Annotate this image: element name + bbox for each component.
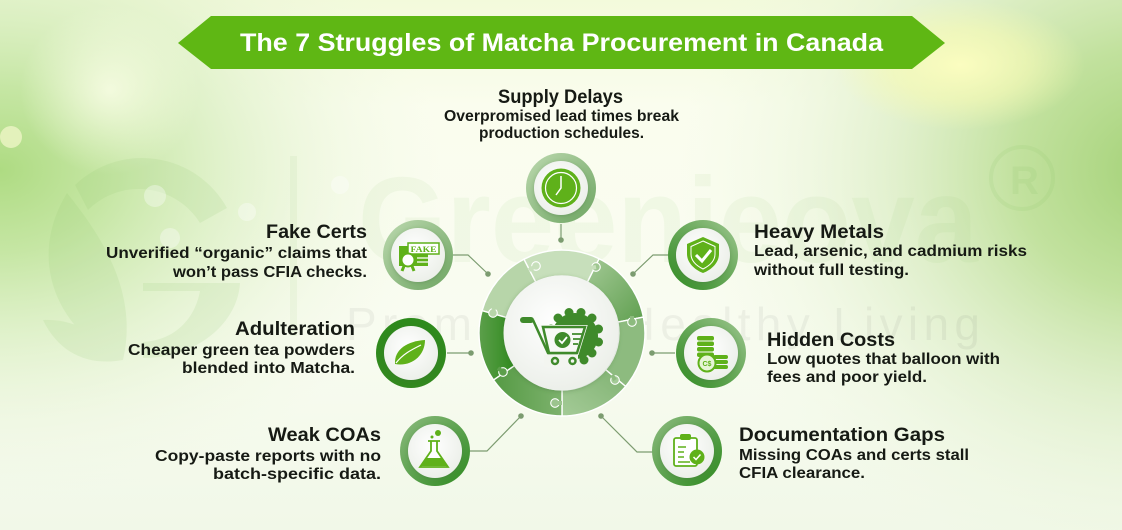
text: Adulteration: Adulteration <box>235 319 355 340</box>
watermark: logo and brand <box>43 147 1053 362</box>
text: Supply Delays <box>444 87 679 142</box>
text: Documentation Gaps: CFIA clearance. <box>739 465 865 482</box>
text: Hidden Costs: Low quotes that balloon with <box>767 351 1000 368</box>
text: Hidden Costs <box>767 330 1000 386</box>
icon circle: clock <box>526 153 596 223</box>
icon circle: flask <box>400 416 470 486</box>
text: Supply Delays: production schedules. <box>479 125 644 142</box>
icon circle: coins <box>676 318 746 388</box>
icon circle: clipboard <box>652 416 722 486</box>
text: Fake Certs: Unverified “organic” claims that <box>106 245 368 262</box>
title banner <box>178 16 945 69</box>
text: Weak COAs <box>155 425 381 483</box>
text: Documentation Gaps: Documentation Gaps <box>739 425 945 446</box>
text: Fake Certs: won’t pass CFIA checks. <box>172 264 367 281</box>
text: Heavy Metals: Heavy Metals <box>754 222 884 243</box>
cart <box>520 317 585 364</box>
text: Adulteration: Cheaper green tea powders <box>128 342 355 359</box>
connectors <box>447 224 675 452</box>
text: Documentation Gaps <box>739 425 969 482</box>
text: Heavy Metals <box>753 222 1027 279</box>
icon circle: fake certificate: FAKE <box>410 244 437 254</box>
title banner: The 7 Struggles of Matcha Procurement in Canada <box>240 29 884 57</box>
icon circle: coins: C$ <box>702 361 712 368</box>
watermark: logo and brand: Promoting Healthy Living <box>346 298 980 350</box>
gear <box>546 308 603 364</box>
icon circle: leaf <box>376 318 446 388</box>
text: Supply Delays: Supply Delays <box>498 87 623 108</box>
text: Weak COAs: Weak COAs <box>268 425 381 446</box>
text: Adulteration: blended into Matcha. <box>182 360 355 377</box>
central puzzle ring <box>479 250 645 416</box>
puzzle knobs <box>489 262 636 407</box>
watermark: logo and brand: R <box>1010 159 1039 203</box>
text: Hidden Costs: fees and poor yield. <box>767 369 927 386</box>
text: Fake Certs <box>106 222 368 281</box>
central disc with cart and gear icon <box>504 276 618 390</box>
text: Documentation Gaps: Missing COAs and certs stall <box>739 447 969 464</box>
text: Supply Delays: Overpromised lead times break <box>444 108 679 125</box>
text: Heavy Metals: without full testing. <box>753 262 909 279</box>
text: Weak COAs: batch-specific data. <box>213 466 381 483</box>
text: Fake Certs: Fake Certs <box>266 222 367 243</box>
icon circle: shield <box>668 220 738 290</box>
icon circle: fake certificate <box>383 220 453 290</box>
text: Heavy Metals: Lead, arsenic, and cadmium risks <box>754 243 1027 260</box>
text: Hidden Costs: Hidden Costs <box>767 330 895 351</box>
text: Adulteration <box>128 319 355 377</box>
text: Weak COAs: Copy-paste reports with no <box>155 448 381 465</box>
watermark: logo and brand: Greenieova <box>358 152 979 288</box>
